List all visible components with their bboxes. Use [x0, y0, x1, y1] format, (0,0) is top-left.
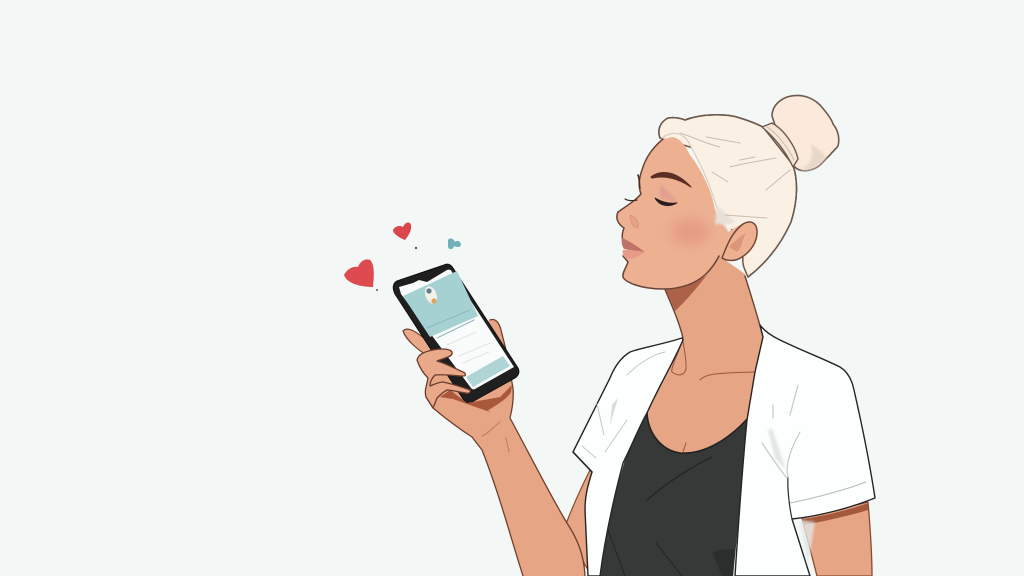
- ear: [722, 222, 757, 260]
- nostril shading: [630, 215, 639, 228]
- right arm: [802, 502, 872, 576]
- large red heart: [344, 259, 374, 287]
- hair bun: [772, 95, 839, 171]
- eyelid: [660, 184, 678, 203]
- teal app header: [403, 271, 478, 337]
- small dots: [376, 247, 417, 291]
- hand and forearm: [403, 319, 585, 576]
- hair front strands: [659, 115, 797, 277]
- lips: [622, 238, 645, 252]
- smartphone: [393, 264, 519, 403]
- black tank top: [598, 405, 750, 576]
- white cardigan left side: [573, 338, 683, 576]
- tank top neckline: [647, 413, 748, 453]
- palm creases: [462, 395, 509, 452]
- phone button: [466, 356, 510, 387]
- hair band: [762, 123, 798, 167]
- eyebrow: [651, 173, 691, 187]
- phone text lines: [427, 310, 474, 338]
- small red heart: [393, 223, 411, 240]
- neck and chest: [647, 255, 763, 453]
- left upper arm behind cardigan: [566, 468, 600, 576]
- blush: [670, 219, 710, 245]
- shadow under phone: [440, 385, 512, 411]
- face: [617, 137, 757, 289]
- teal bow: [448, 239, 461, 249]
- closed eye: [655, 198, 677, 206]
- hair back: [659, 115, 797, 277]
- fingers over phone: [417, 349, 470, 408]
- phone screen: [399, 270, 514, 389]
- index fingertip behind phone: [403, 329, 436, 356]
- lashes: [625, 199, 637, 201]
- white cardigan right side: [735, 325, 875, 576]
- phone app icon: [423, 285, 439, 305]
